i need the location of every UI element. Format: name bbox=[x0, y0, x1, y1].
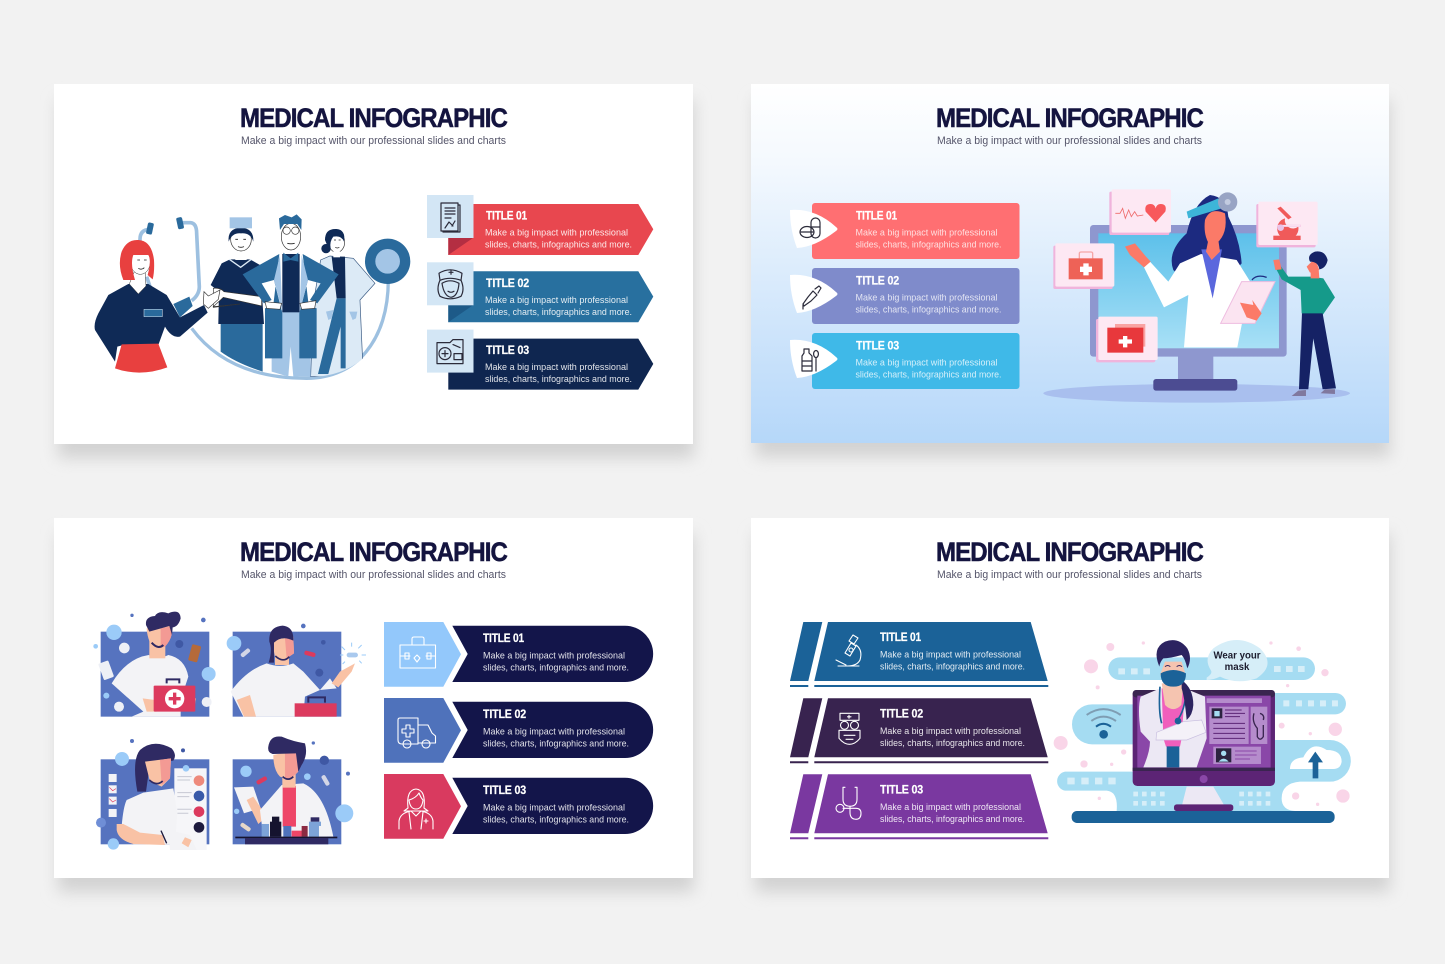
illustration: doctor on monitor bbox=[1043, 189, 1350, 403]
card: title 02: TITLE 02 bbox=[483, 709, 526, 721]
card: title 02: slides, charts, infographics and more. bbox=[880, 738, 1025, 749]
icon: pills bbox=[800, 218, 820, 238]
card: title 01 bbox=[790, 622, 1048, 687]
card: title 01: TITLE 01 bbox=[486, 210, 528, 222]
card: title 02: Make a big impact with professional bbox=[485, 295, 628, 306]
card: title 03: Make a big impact with professional bbox=[880, 802, 1021, 813]
panel: online doctor bbox=[751, 84, 1390, 457]
icon: document bbox=[441, 203, 460, 232]
icon: microscope bbox=[836, 635, 861, 666]
speech bubble text: Wear your bbox=[1213, 651, 1261, 662]
illustration: four medical portraits bbox=[93, 612, 366, 850]
card: title 02: TITLE 02 bbox=[880, 708, 923, 720]
card: title 01 bbox=[384, 622, 653, 687]
card: title 03 bbox=[427, 330, 653, 390]
subtitle: Make a big impact with our professional slides and charts bbox=[241, 569, 506, 581]
card: title 03: TITLE 03 bbox=[880, 784, 923, 796]
card: title 02: TITLE 02 bbox=[486, 278, 529, 290]
icon: ambulance bbox=[398, 718, 436, 748]
title: MEDICAL INFOGRAPHIC bbox=[936, 537, 1204, 567]
card: title 01: slides, charts, infographics and more. bbox=[880, 662, 1025, 672]
card: title 01: slides, charts, infographics and more. bbox=[856, 240, 1002, 250]
card: title 01: TITLE 01 bbox=[856, 210, 898, 222]
card: title 03: slides, charts, infographics and more. bbox=[856, 370, 1002, 380]
card: title 02: Make a big impact with professional bbox=[880, 726, 1021, 737]
card: title 01: TITLE 01 bbox=[880, 632, 922, 644]
card: title 02 bbox=[790, 698, 1048, 763]
subtitle: Make a big impact with our professional slides and charts bbox=[937, 135, 1202, 147]
card: title 01: Make a big impact with professional bbox=[856, 228, 998, 238]
card: title 02: slides, charts, infographics and more. bbox=[485, 307, 632, 318]
card: title 03 bbox=[384, 774, 653, 839]
illustration: doctor in mask on monitor: mask bbox=[1225, 662, 1250, 673]
portrait: woman with pills bbox=[227, 624, 366, 717]
portrait: woman with patient list bbox=[96, 739, 209, 850]
card: title 03: slides, charts, infographics and more. bbox=[880, 814, 1025, 825]
illustration: doctor in mask on monitor bbox=[1054, 640, 1351, 823]
card: title 02: TITLE 02 bbox=[856, 276, 899, 288]
title: MEDICAL INFOGRAPHIC bbox=[936, 103, 1204, 133]
card: title 01: slides, charts, infographics and more. bbox=[485, 240, 632, 250]
icon: surgeon bbox=[839, 713, 860, 744]
icon: nurse bbox=[438, 270, 463, 299]
card: title 02 bbox=[790, 268, 1020, 324]
card: title 01: slides, charts, infographics and more. bbox=[483, 662, 629, 674]
icon: syrup and spoon bbox=[802, 349, 818, 371]
title: MEDICAL INFOGRAPHIC bbox=[240, 537, 508, 567]
card: title 03: Make a big impact with professional bbox=[483, 802, 625, 814]
card: title 01: Make a big impact with professional bbox=[485, 228, 628, 238]
panel: team of medical staff bbox=[54, 84, 694, 458]
card: title 01: Make a big impact with professional bbox=[483, 650, 625, 662]
card: title 02: slides, charts, infographics and more. bbox=[483, 738, 629, 750]
card: title 02 bbox=[427, 262, 653, 322]
card: title 03: Make a big impact with professional bbox=[856, 358, 998, 368]
title: MEDICAL INFOGRAPHIC bbox=[240, 103, 508, 133]
card: title 02: slides, charts, infographics and more. bbox=[856, 304, 1002, 316]
card: title 03 bbox=[790, 774, 1048, 839]
card: title 01 bbox=[790, 203, 1020, 259]
panel: four care workers bbox=[54, 518, 694, 892]
icon: female doctor bbox=[399, 789, 433, 829]
card: title 02: Make a big impact with professional bbox=[483, 726, 625, 738]
portrait: man with first aid kit bbox=[93, 612, 216, 717]
icon: stethoscope bbox=[836, 787, 861, 819]
card: title 01: TITLE 01 bbox=[483, 633, 525, 645]
icon: medical folder bbox=[437, 340, 463, 364]
subtitle: Make a big impact with our professional slides and charts bbox=[937, 569, 1202, 581]
card: title 03: TITLE 03 bbox=[486, 345, 529, 357]
card: title 03: TITLE 03 bbox=[856, 340, 899, 352]
subtitle: Make a big impact with our professional slides and charts bbox=[241, 135, 506, 147]
icon: medical case bbox=[400, 637, 436, 668]
card: title 03: TITLE 03 bbox=[483, 785, 526, 797]
card: title 01: Make a big impact with professional bbox=[880, 650, 1021, 660]
card: title 02: Make a big impact with professional bbox=[856, 292, 998, 304]
portrait: pharmacist bbox=[233, 736, 353, 844]
card: title 03: Make a big impact with professional bbox=[485, 362, 628, 373]
card: title 02 bbox=[384, 698, 653, 763]
card: title 01 bbox=[427, 195, 653, 255]
card: title 03: slides, charts, infographics and more. bbox=[485, 374, 632, 385]
card: title 03 bbox=[790, 333, 1020, 389]
illustration: medical team with stethoscope bbox=[95, 214, 410, 378]
icon: dropper bbox=[803, 286, 821, 309]
card: title 03: slides, charts, infographics and more. bbox=[483, 814, 629, 826]
panel: wear your mask bbox=[751, 518, 1390, 892]
